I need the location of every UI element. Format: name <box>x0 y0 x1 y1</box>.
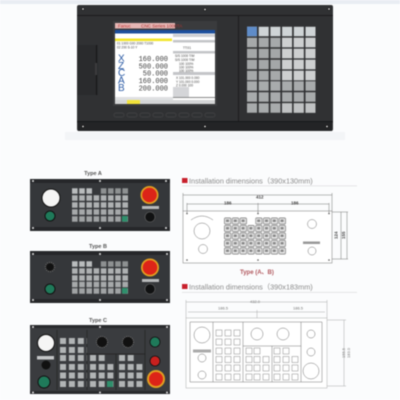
panel: Type B controller <box>30 251 170 303</box>
right status column: Z 0.000 100 <box>176 84 193 88</box>
icon: handwheel <box>38 334 54 352</box>
icon: selector knob <box>42 360 50 370</box>
screen: Fanuc <box>118 24 131 28</box>
icon: rotary knobs <box>96 336 134 348</box>
axis readouts: 160.000 <box>139 78 168 86</box>
soft keys <box>114 113 215 117</box>
diagram: dimensions type C: 155.5 <box>341 347 346 358</box>
diagram: dimensions type A/B: 186 <box>224 200 232 206</box>
cut-outs <box>193 327 319 379</box>
label: Type A: Type A <box>84 171 102 177</box>
keypad <box>72 264 129 291</box>
icon: rotary knob <box>46 262 54 272</box>
icon: emergency stop <box>140 186 158 204</box>
icon: green push button <box>150 337 160 347</box>
axis readouts: X <box>118 54 125 64</box>
label: Type C: Type C <box>89 318 107 324</box>
heading: installation dimensions C: Installation dimensions（390x183mm) <box>189 282 313 292</box>
right status column: TT:01 <box>183 46 191 50</box>
right status column: 100 100% <box>179 66 194 70</box>
axis readouts: 160.000 <box>139 56 168 64</box>
diagram: dimensions type A/B: 155 <box>341 231 346 239</box>
axis readouts: Z <box>118 61 124 72</box>
caption: Type (A, B): Type (A、B) <box>240 270 274 276</box>
right status column: 100 100% <box>179 62 194 66</box>
right status column: S/S 1000 T/M <box>175 58 195 62</box>
icon: emergency stop <box>147 370 165 388</box>
screen: 02 200 S-10 Y <box>117 46 138 50</box>
screws <box>82 8 330 128</box>
main keypad <box>247 32 317 108</box>
icon: handwheel <box>42 189 60 207</box>
dimension lines <box>186 300 346 386</box>
heading: installation dimensions A/B <box>182 176 357 186</box>
axis readouts: C <box>118 68 125 79</box>
right status column: 100 100% <box>179 69 194 73</box>
panel: Type C controller <box>30 325 170 394</box>
label: Type B: Type B <box>89 244 107 250</box>
right status column: Y 101.000 0.000 <box>176 80 200 84</box>
heading: installation dimensions C <box>182 282 357 293</box>
axis readouts: 500.000 <box>139 64 168 72</box>
heading: installation dimensions A/B: Installation dimensions（390x130mm) <box>189 176 313 186</box>
keypad <box>72 191 129 219</box>
icon: green button <box>45 211 55 221</box>
diagram: dimensions type C: 186.5 <box>293 306 304 310</box>
highlighted key <box>247 27 257 36</box>
icon: green button <box>38 376 50 388</box>
axis readouts <box>118 54 168 94</box>
axis readouts: B <box>118 83 125 94</box>
dimension lines <box>183 193 348 259</box>
axis readouts: 200.000 <box>139 86 168 94</box>
icon: selector knob <box>145 284 155 294</box>
right status column <box>173 34 215 104</box>
axis readouts: A <box>118 76 125 86</box>
diagram: dimensions type A/B: 124 <box>334 231 338 239</box>
axis readouts: 50.000 <box>143 70 168 78</box>
diagram: dimensions type C: 186.5 <box>218 306 229 310</box>
right status column: S/S 1000 T/M <box>175 54 195 58</box>
icon: red push button <box>150 356 160 366</box>
middle keypad <box>90 358 114 384</box>
panel cut-outs <box>194 223 210 239</box>
diagram: dimensions type A/B <box>183 193 348 263</box>
screen: CNC Series 1000TA <box>141 24 183 28</box>
icon: selector knob <box>145 212 155 222</box>
diagram: dimensions type A/B: 412 <box>256 194 264 200</box>
diagram: dimensions type A/B: 186 <box>291 200 299 206</box>
key grid <box>224 218 286 255</box>
diagram: dimensions type C <box>186 299 351 388</box>
right status column: X 101.000 0.000 <box>176 76 200 80</box>
diagram: dimensions type C: 432.0 <box>250 299 261 304</box>
diagram: dimensions type C: 183.0 <box>346 347 351 358</box>
icon: green button <box>45 284 55 294</box>
screen <box>113 21 217 106</box>
panel: Type A controller <box>30 179 170 231</box>
panel: main CNC controller <box>77 5 333 131</box>
right keypad <box>119 358 143 384</box>
key grids <box>216 330 298 380</box>
section dividers <box>190 322 322 382</box>
screen: 01 1000 G00 2000 T1000 <box>117 42 154 46</box>
icon: emergency stop <box>141 258 159 276</box>
left keypad <box>60 341 87 384</box>
